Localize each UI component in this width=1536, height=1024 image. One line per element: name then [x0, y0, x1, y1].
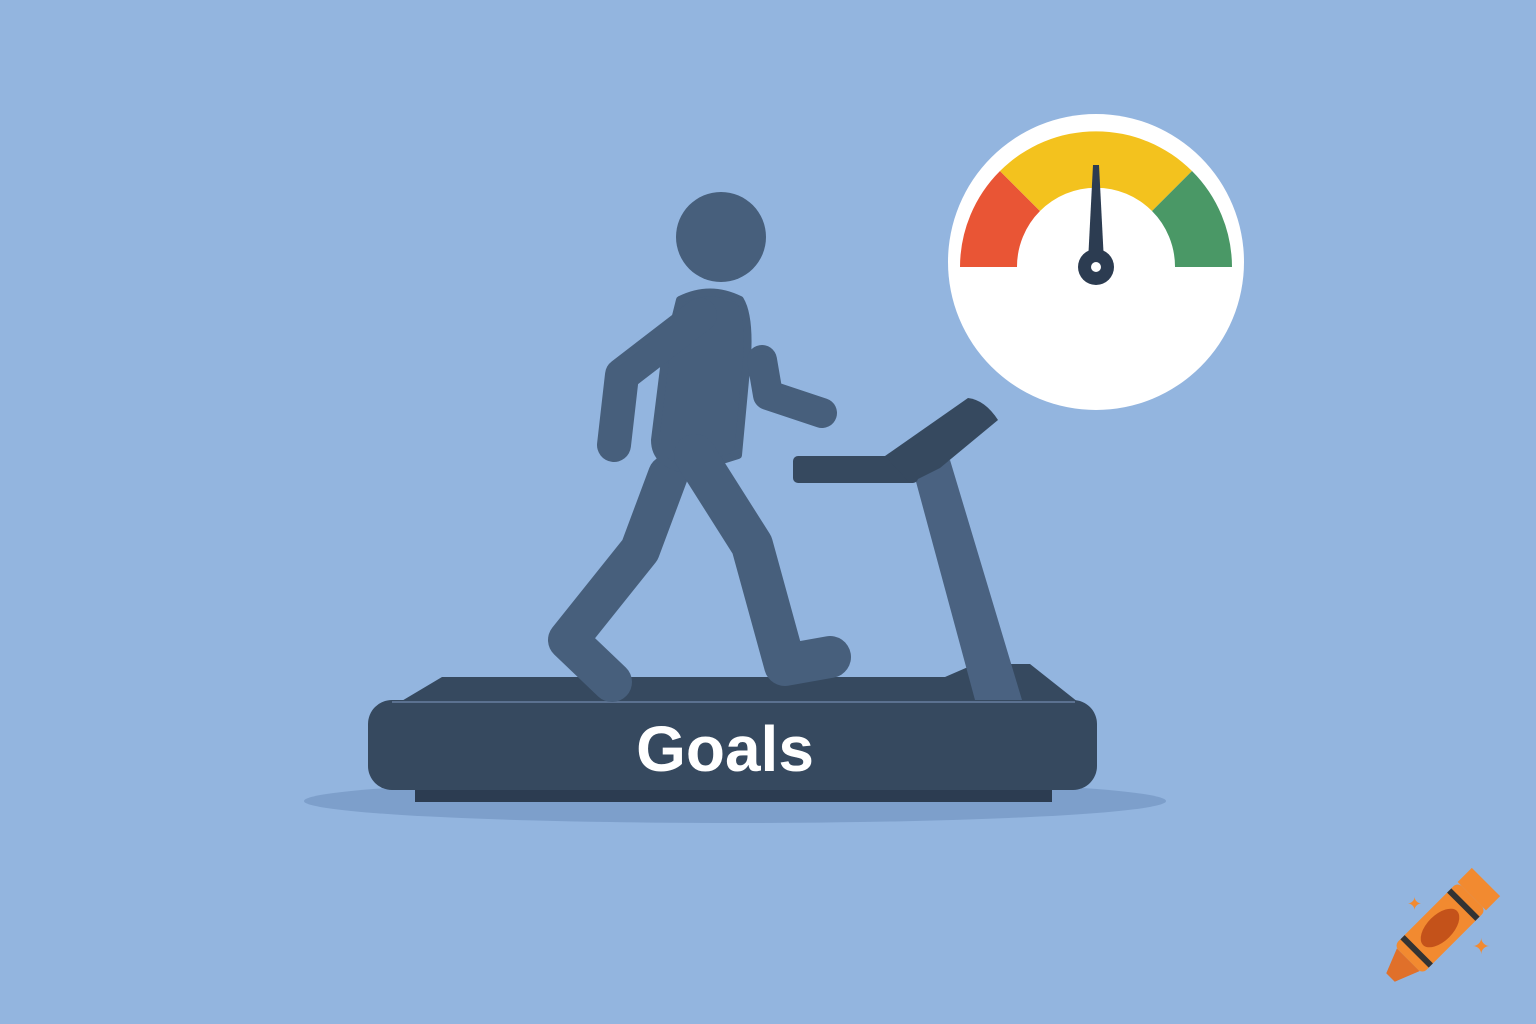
walking figure [568, 192, 830, 682]
front leg [695, 455, 830, 665]
text: ✦ [1407, 894, 1422, 915]
icon: crayon [1376, 868, 1500, 992]
gauge [948, 114, 1244, 410]
treadmill [368, 398, 1097, 802]
needle [1088, 165, 1104, 262]
torso [655, 292, 748, 470]
treadmill post [915, 460, 1022, 700]
label: Goals: Goals [636, 713, 814, 785]
front arm [762, 360, 822, 413]
back arm [614, 315, 700, 445]
handlebar [793, 456, 918, 483]
text: ✦ [1472, 935, 1490, 960]
back leg [568, 475, 668, 682]
shadow under treadmill [304, 779, 1166, 823]
